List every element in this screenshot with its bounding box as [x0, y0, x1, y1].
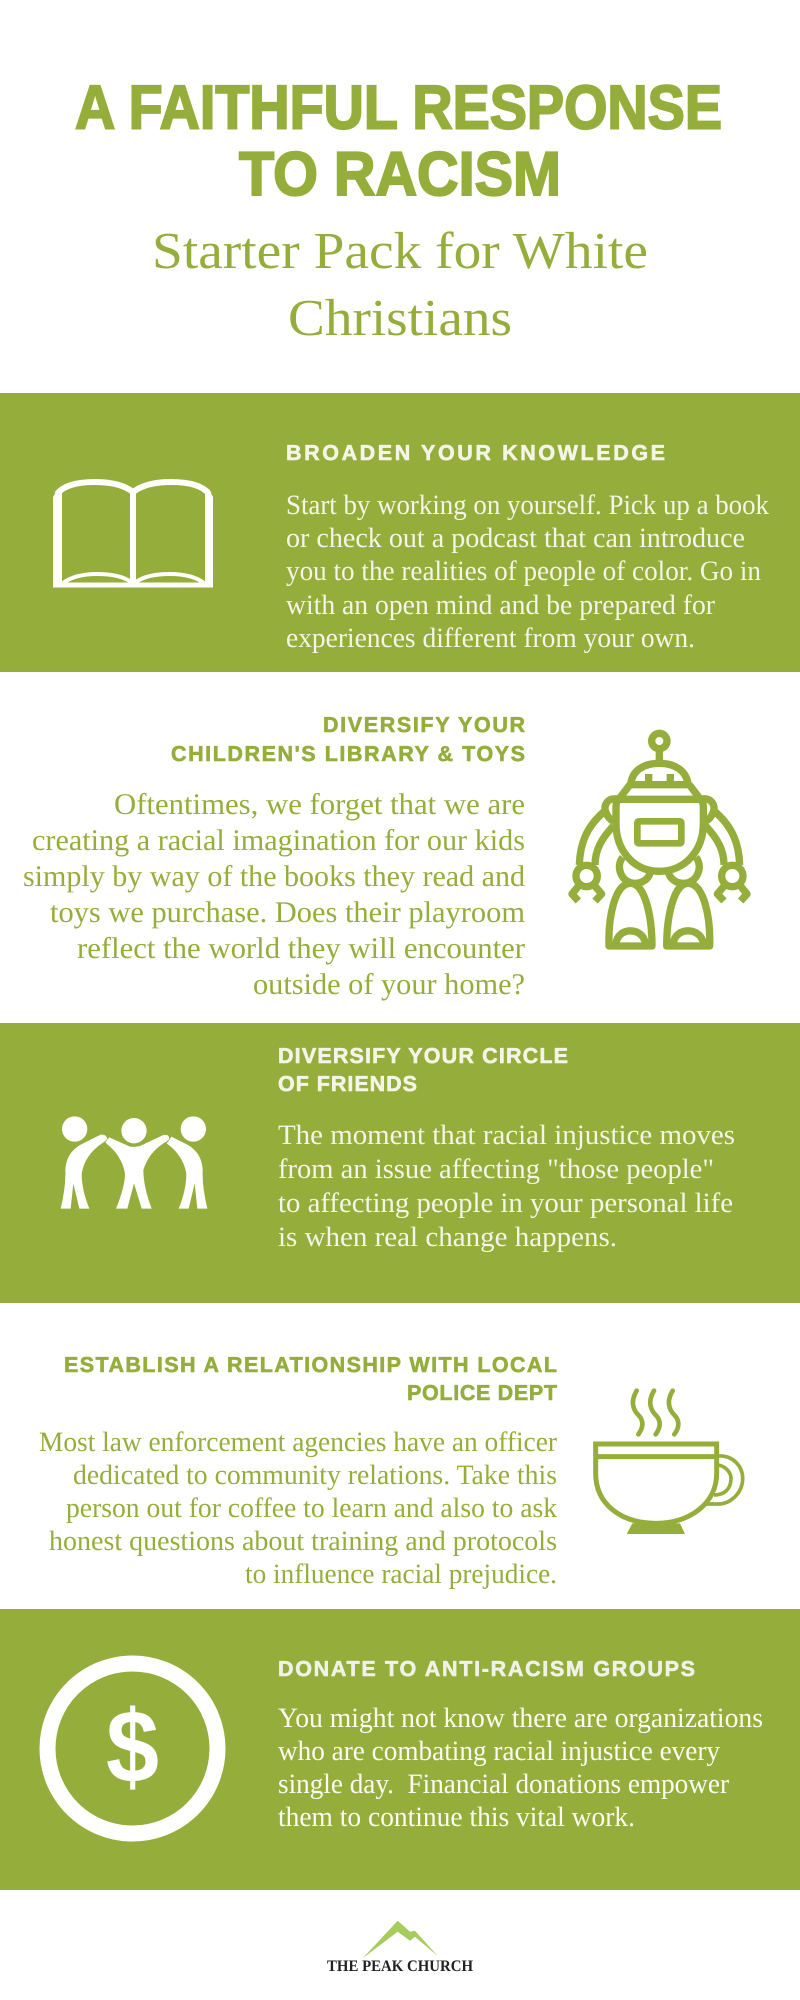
heading: DIVERSIFY YOUR	[323, 713, 525, 737]
body text: you to the realities of people of color. Go in	[286, 556, 761, 587]
heading: POLICE DEPT	[407, 1381, 557, 1405]
body text	[278, 1703, 763, 1833]
heading: OF FRIENDS	[278, 1072, 417, 1096]
heading: BROADEN YOUR KNOWLEDGE	[286, 441, 665, 465]
body text: The moment that racial injustice moves	[278, 1120, 735, 1151]
icon: robot	[572, 733, 747, 946]
logo: the peak church	[327, 1921, 474, 1975]
body text: toys we purchase. Does their playroom	[50, 896, 525, 929]
heading: DONATE TO ANTI-RACISM GROUPS	[278, 1657, 695, 1681]
body text: is when real change happens.	[278, 1222, 617, 1253]
body text: dedicated to community relations. Take this	[73, 1460, 557, 1491]
body text: to affecting people in your personal life	[278, 1188, 733, 1219]
heading	[64, 1353, 557, 1405]
icon: dollar coin	[48, 1664, 218, 1834]
body text: creating a racial imagination for our kids	[32, 824, 525, 857]
panel: broaden your knowledge	[0, 393, 800, 672]
body text: single day. Financial donations empower	[278, 1769, 730, 1800]
heading	[171, 713, 525, 766]
body text: Oftentimes, we forget that we are	[114, 788, 525, 821]
title: A FAITHFUL RESPONSE	[75, 74, 722, 142]
body text: Most law enforcement agencies have an officer	[39, 1427, 558, 1458]
heading: DIVERSIFY YOUR CIRCLE	[278, 1044, 568, 1068]
heading	[278, 1044, 568, 1096]
body text: You might not know there are organizations	[278, 1703, 763, 1734]
body text: person out for coffee to learn and also to ask	[66, 1493, 557, 1524]
title	[75, 74, 722, 209]
panel: diversify children's library and toys	[0, 672, 800, 1023]
icon: coffee cup	[596, 1391, 743, 1534]
body text	[278, 1120, 735, 1253]
icon: three people	[61, 1116, 207, 1209]
body text: with an open mind and be prepared for	[286, 590, 716, 621]
body text: from an issue affecting "those people"	[278, 1154, 714, 1185]
subtitle	[152, 223, 648, 347]
subtitle: Christians	[288, 290, 512, 347]
body text: outside of your home?	[253, 968, 525, 1001]
body text: Start by working on yourself. Pick up a book	[286, 490, 769, 521]
subtitle: Starter Pack for White	[152, 223, 648, 280]
body text: them to continue this vital work.	[278, 1802, 635, 1833]
icon: dollar coin: $	[106, 1689, 159, 1804]
body text: honest questions about training and protocols	[49, 1526, 557, 1557]
body text: simply by way of the books they read and	[23, 860, 525, 893]
body text: reflect the world they will encounter	[77, 932, 525, 965]
heading: ESTABLISH A RELATIONSHIP WITH LOCAL	[64, 1353, 557, 1377]
body text: experiences different from your own.	[286, 623, 695, 654]
icon: open book	[53, 482, 213, 587]
logo wordmark: THE PEAK CHURCH	[327, 1958, 474, 1975]
heading: CHILDREN'S LIBRARY & TOYS	[171, 742, 525, 766]
body text	[286, 490, 769, 654]
panel: diversify your circle of friends	[0, 1023, 800, 1303]
title: TO RACISM	[239, 140, 561, 209]
body text	[39, 1427, 558, 1590]
body text: who are combating racial injustice every	[278, 1736, 720, 1767]
body text: or check out a podcast that can introduce	[286, 523, 745, 554]
body text: to influence racial prejudice.	[245, 1559, 557, 1590]
panel: relationship with local police	[0, 1303, 800, 1609]
icon: mountain	[363, 1921, 438, 1958]
body text	[23, 788, 525, 1001]
panel: donate to anti-racism groups	[0, 1609, 800, 1890]
